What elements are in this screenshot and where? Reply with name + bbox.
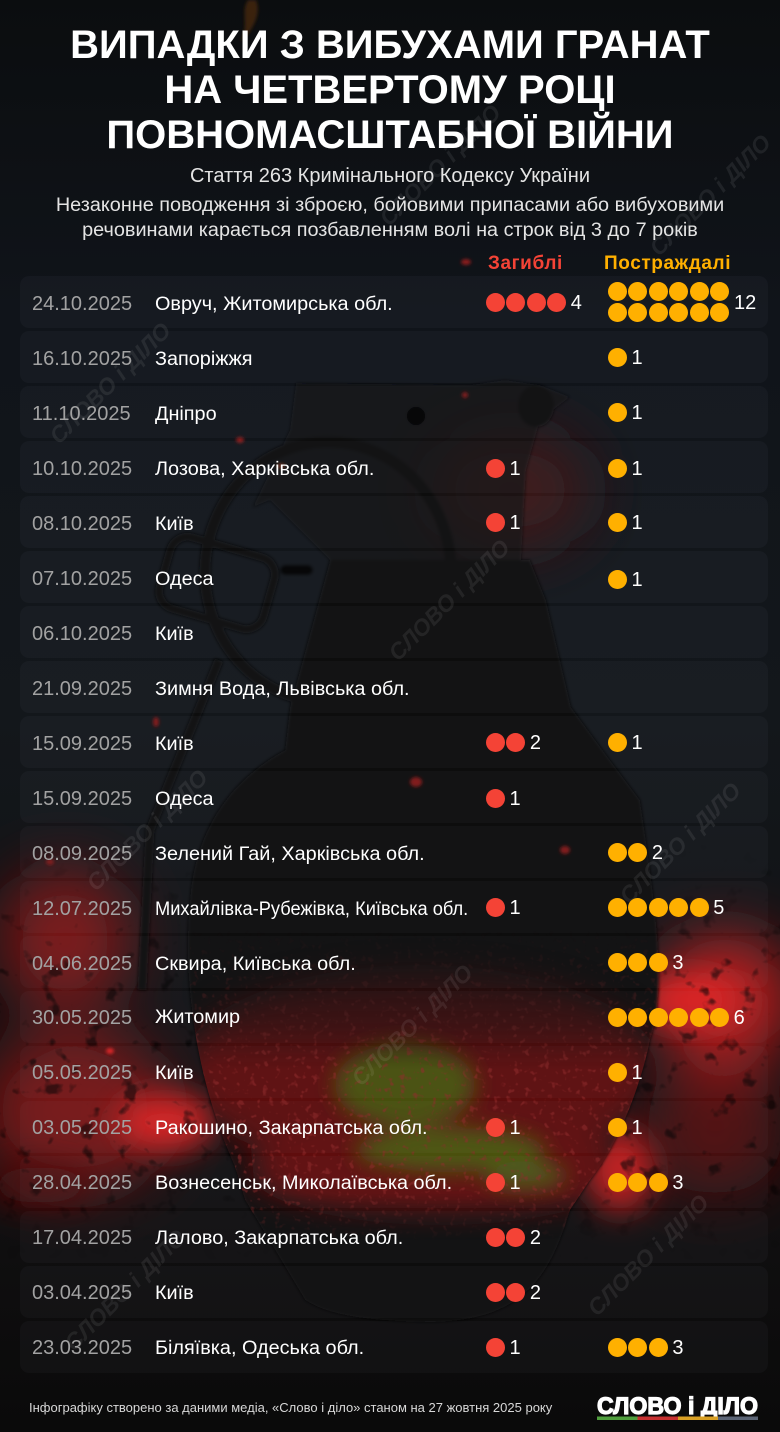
row 06.10.2025 bbox=[20, 606, 768, 658]
row 11.10.2025: 11.10.2025 bbox=[32, 403, 131, 425]
killed 1 bbox=[486, 512, 521, 534]
killed 1 bbox=[486, 788, 521, 810]
watermark: СЛОВО і ДІЛО bbox=[582, 1189, 714, 1321]
row 23.03.2025 bbox=[20, 1321, 768, 1373]
injured 3: 3 bbox=[672, 952, 683, 974]
description: речовинами карається позбавленням волі на строк від 3 до 7 років bbox=[82, 219, 698, 241]
title: НА ЧЕТВЕРТОМУ РОЦІ bbox=[164, 68, 616, 112]
injured 1 bbox=[608, 1117, 643, 1139]
killed 1: 1 bbox=[509, 512, 521, 534]
killed 2 bbox=[486, 1282, 541, 1304]
injured 12: 12 bbox=[734, 292, 756, 314]
injured 3 bbox=[608, 1172, 683, 1194]
row 17.04.2025 bbox=[20, 1211, 768, 1263]
killed 1: 1 bbox=[509, 458, 521, 480]
injured 3: 3 bbox=[672, 1337, 683, 1359]
grenade silhouette bbox=[188, 560, 659, 1322]
row 15.09.2025 bbox=[20, 716, 768, 768]
row 03.04.2025: Київ bbox=[155, 1282, 194, 1304]
top flame streak bbox=[240, 0, 258, 42]
row 15.09.2025: 15.09.2025 bbox=[32, 788, 132, 810]
row 28.04.2025: Вознесенськ, Миколаївська обл. bbox=[155, 1172, 452, 1194]
injured 6 bbox=[608, 1007, 745, 1029]
injured 1: 1 bbox=[631, 512, 643, 534]
injured 1: 1 bbox=[631, 569, 643, 591]
killed 2 bbox=[486, 1227, 541, 1249]
injured 2: 2 bbox=[652, 842, 663, 864]
killed 4: 4 bbox=[571, 292, 582, 314]
row 05.05.2025 bbox=[20, 1046, 768, 1098]
injured 1 bbox=[608, 1062, 643, 1084]
killed 1 bbox=[486, 1172, 521, 1194]
subtitle: article reference: Стаття 263 Кримінального Кодексу України bbox=[190, 165, 590, 187]
row 07.10.2025: Одеса bbox=[155, 568, 214, 590]
row 11.10.2025 bbox=[20, 386, 768, 438]
row 08.10.2025: 08.10.2025 bbox=[32, 513, 132, 535]
injured 1: 1 bbox=[631, 458, 643, 480]
description: Незаконне поводження зі зброєю, бойовими припасами або вибуховими bbox=[56, 194, 724, 216]
logo: СЛОВО і ДІЛО bbox=[597, 1393, 758, 1420]
killed 1: 1 bbox=[509, 1337, 521, 1359]
row 03.05.2025 bbox=[20, 1101, 768, 1153]
injured 3 bbox=[608, 952, 683, 974]
row 06.10.2025: 06.10.2025 bbox=[32, 623, 132, 645]
row 04.06.2025: 04.06.2025 bbox=[32, 953, 132, 975]
row 12.07.2025: Михайлівка-Рубежівка, Київська обл. bbox=[155, 898, 468, 920]
title: ВИПАДКИ З ВИБУХАМИ ГРАНАТ bbox=[70, 23, 710, 67]
watermark: СЛОВО і ДІЛО bbox=[59, 1224, 191, 1356]
row 04.06.2025 bbox=[20, 936, 768, 988]
row 08.10.2025: Київ bbox=[155, 513, 194, 535]
title bbox=[70, 23, 710, 157]
watermark: СЛОВО і ДІЛО bbox=[81, 764, 213, 896]
row 16.10.2025: 16.10.2025 bbox=[32, 348, 132, 370]
row 08.09.2025 bbox=[20, 826, 768, 878]
row 15.09.2025: Київ bbox=[155, 733, 194, 755]
row 11.10.2025: Дніпро bbox=[155, 403, 217, 425]
watermark: СЛОВО і ДІЛО bbox=[374, 99, 506, 231]
killed 1: 1 bbox=[509, 1172, 521, 1194]
row 15.09.2025: 15.09.2025 bbox=[32, 733, 132, 755]
row 10.10.2025: Лозова, Харківська обл. bbox=[155, 458, 374, 480]
injured 5 bbox=[608, 897, 724, 919]
row 24.10.2025: Овруч, Житомирська обл. bbox=[155, 293, 393, 315]
killed 1 bbox=[486, 1117, 521, 1139]
killed 1 bbox=[486, 897, 521, 919]
sparks bbox=[236, 437, 244, 443]
row 23.03.2025: Біляївка, Одеська обл. bbox=[155, 1337, 364, 1359]
row 21.09.2025 bbox=[20, 661, 768, 713]
row 07.10.2025 bbox=[20, 551, 768, 603]
row 23.03.2025: 23.03.2025 bbox=[32, 1337, 132, 1359]
watermark: СЛОВО і ДІЛО bbox=[383, 534, 515, 666]
killed 1 bbox=[486, 458, 521, 480]
row 03.04.2025: 03.04.2025 bbox=[32, 1282, 132, 1304]
injured 1 bbox=[608, 458, 643, 480]
killed 4 bbox=[486, 292, 582, 314]
injured 2 bbox=[608, 842, 663, 864]
injured 1 bbox=[608, 512, 643, 534]
injured 1 bbox=[608, 732, 643, 754]
row 16.10.2025 bbox=[20, 331, 768, 383]
injured 1 bbox=[608, 569, 643, 591]
killed 1 bbox=[486, 1337, 521, 1359]
row 16.10.2025: Запоріжжя bbox=[155, 348, 253, 370]
row 08.10.2025 bbox=[20, 496, 768, 548]
row 12.07.2025 bbox=[20, 881, 768, 933]
row 03.05.2025: Ракошино, Закарпатська обл. bbox=[155, 1117, 428, 1139]
injured 1: 1 bbox=[631, 732, 643, 754]
injured 6: 6 bbox=[734, 1007, 745, 1029]
row 30.05.2025 bbox=[20, 991, 768, 1043]
row 05.05.2025: 05.05.2025 bbox=[32, 1062, 132, 1084]
row 08.09.2025: 08.09.2025 bbox=[32, 843, 132, 865]
row 30.05.2025: 30.05.2025 bbox=[32, 1007, 132, 1029]
row 08.09.2025: Зелений Гай, Харківська обл. bbox=[155, 843, 425, 865]
injured 1: 1 bbox=[631, 347, 643, 369]
row 03.05.2025: 03.05.2025 bbox=[32, 1117, 132, 1139]
footer source note: Інфографіку створено за даними медіа, «Слово і діло» станом на 27 жовтня 2025 року bbox=[29, 1400, 552, 1415]
row 07.10.2025: 07.10.2025 bbox=[32, 568, 132, 590]
watermark: СЛОВО і ДІЛО bbox=[346, 959, 478, 1091]
row 04.06.2025: Сквира, Київська обл. bbox=[155, 953, 356, 975]
description bbox=[56, 194, 724, 241]
row 15.09.2025: Одеса bbox=[155, 788, 214, 810]
row 10.10.2025 bbox=[20, 441, 768, 493]
injured 1 bbox=[608, 347, 643, 369]
injured 1: 1 bbox=[631, 1117, 643, 1139]
row 17.04.2025: Лалово, Закарпатська обл. bbox=[155, 1227, 403, 1249]
killed 2: 2 bbox=[530, 1282, 541, 1304]
injured 3: 3 bbox=[672, 1172, 683, 1194]
killed 1: 1 bbox=[509, 1117, 521, 1139]
row 12.07.2025: 12.07.2025 bbox=[32, 898, 132, 920]
injured 12 bbox=[608, 282, 756, 322]
watermark: СЛОВО і ДІЛО bbox=[614, 777, 746, 909]
killed 1: 1 bbox=[509, 897, 521, 919]
killed 1: 1 bbox=[509, 788, 521, 810]
row 28.04.2025: 28.04.2025 bbox=[32, 1172, 132, 1194]
row 10.10.2025: 10.10.2025 bbox=[32, 458, 132, 480]
column header: killed: Загиблі bbox=[488, 253, 563, 274]
row 30.05.2025: Житомир bbox=[155, 1006, 240, 1028]
row 21.09.2025: 21.09.2025 bbox=[32, 678, 132, 700]
row 05.05.2025: Київ bbox=[155, 1062, 194, 1084]
watermark: СЛОВО і ДІЛО bbox=[44, 317, 176, 449]
injured 3 bbox=[608, 1337, 683, 1359]
row 15.09.2025 bbox=[20, 771, 768, 823]
row 28.04.2025 bbox=[20, 1156, 768, 1208]
row 21.09.2025: Зимня Вода, Львівська обл. bbox=[155, 678, 410, 700]
row 24.10.2025 bbox=[20, 276, 768, 328]
injured 5: 5 bbox=[713, 897, 724, 919]
watermark: СЛОВО і ДІЛО bbox=[644, 129, 776, 261]
injured 1: 1 bbox=[631, 402, 643, 424]
row 17.04.2025: 17.04.2025 bbox=[32, 1227, 132, 1249]
injured 1 bbox=[608, 402, 643, 424]
injured 1: 1 bbox=[631, 1062, 643, 1084]
killed 2: 2 bbox=[530, 1227, 541, 1249]
killed 2 bbox=[486, 732, 541, 754]
title: ПОВНОМАСШТАБНОЇ ВІЙНИ bbox=[106, 113, 674, 157]
row 03.04.2025 bbox=[20, 1266, 768, 1318]
column header: injured: Постраждалі bbox=[604, 253, 731, 274]
row 24.10.2025: 24.10.2025 bbox=[32, 293, 132, 315]
row 06.10.2025: Київ bbox=[155, 623, 194, 645]
killed 2: 2 bbox=[530, 732, 541, 754]
